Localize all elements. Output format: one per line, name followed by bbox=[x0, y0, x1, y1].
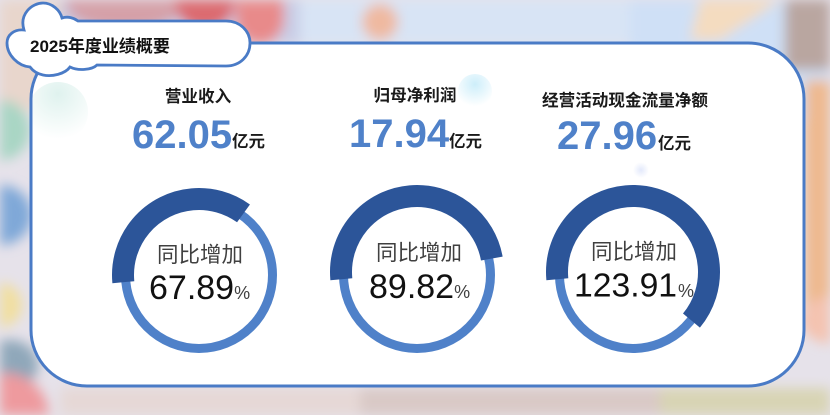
value: net profit: 17.94 bbox=[349, 112, 450, 156]
donut chart: net profit growth bbox=[335, 190, 499, 354]
label: revenue: 营业收入 bbox=[165, 87, 232, 106]
caption: 同比增加 bbox=[376, 241, 462, 265]
unit: revenue: 亿元 bbox=[232, 132, 265, 151]
header: cloud title badge bbox=[7, 3, 250, 76]
percent sign: % bbox=[678, 281, 694, 301]
title: 2025年度业绩概要 bbox=[30, 36, 170, 56]
unit: cash flow: 亿元 bbox=[658, 134, 691, 153]
metric: operating revenue bbox=[132, 87, 265, 157]
metric: operating cash flow bbox=[542, 90, 708, 158]
percentage: 89.82% bbox=[369, 268, 470, 306]
panel: main white card bbox=[28, 43, 804, 386]
value: cash flow: 27.96 bbox=[557, 114, 657, 158]
percentage: 67.89% bbox=[149, 269, 250, 307]
donut chart: cash flow growth bbox=[551, 190, 715, 354]
caption: 同比增加 bbox=[591, 240, 677, 264]
label: cash flow: 经营活动现金流量净额 bbox=[542, 90, 708, 110]
metric: net profit bbox=[349, 85, 482, 156]
unit: net profit: 亿元 bbox=[449, 132, 482, 151]
caption: 同比增加 bbox=[157, 243, 243, 267]
value: revenue: 62.05 bbox=[132, 113, 232, 157]
percentage: 123.91 bbox=[574, 266, 677, 304]
donut chart: revenue growth bbox=[117, 193, 281, 357]
label: net profit: 归母净利润 bbox=[374, 85, 456, 105]
